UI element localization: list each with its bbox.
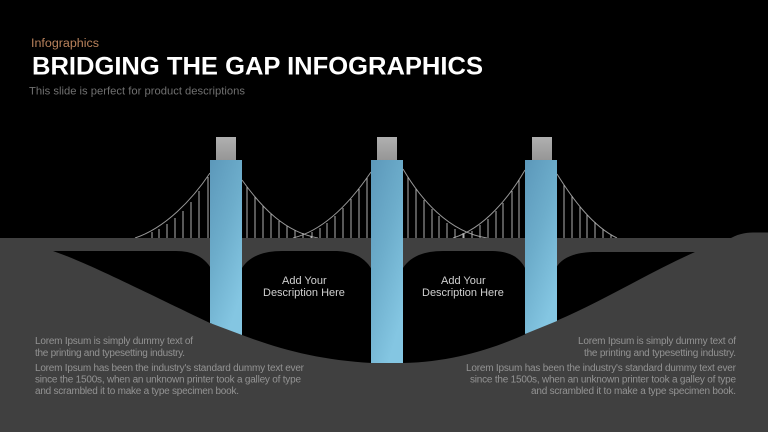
tower: left — [210, 137, 242, 335]
text block: left: the printing and typesetting industry. — [35, 348, 185, 359]
tower column — [525, 160, 557, 334]
text block: right: since the 1500s, when an unknown printer took a galley of type — [470, 374, 736, 386]
span label right: Description Here — [422, 287, 504, 299]
text block: right — [466, 336, 737, 397]
eyebrow label: Infographics — [31, 38, 99, 50]
text block: right: Lorem Ipsum has been the industry's standard dummy text ever — [466, 363, 737, 374]
text block: left: Lorem Ipsum is simply dummy text of — [35, 336, 193, 347]
span label left: Description Here — [263, 287, 345, 299]
tower cap — [216, 137, 236, 160]
text block: left: and scrambled it to make a type specimen book. — [35, 386, 239, 397]
tower cap — [532, 137, 552, 160]
text block: left — [35, 336, 305, 397]
tower column — [210, 160, 242, 335]
opening under centre-right span — [403, 251, 526, 363]
opening under centre-left span — [242, 251, 372, 363]
text block: left: since the 1500s, when an unknown printer took a galley of type — [35, 374, 301, 386]
vertical hangers — [152, 177, 611, 238]
ground and bridge deck — [0, 232, 768, 432]
tower column — [371, 160, 403, 363]
text block: left: Lorem Ipsum has been the industry's standard dummy text ever — [35, 363, 305, 374]
main cables — [135, 173, 210, 238]
opening under right span — [556, 252, 695, 321]
span label left: Add Your — [282, 275, 327, 287]
title: BRIDGING THE GAP INFOGRAPHICS — [32, 52, 483, 80]
heading block — [29, 38, 483, 98]
tower cap — [377, 137, 397, 160]
text block: right: and scrambled it to make a type specimen book. — [531, 386, 736, 397]
suspension cables and hangers — [135, 169, 617, 238]
subtitle: This slide is perfect for product descriptions — [29, 86, 245, 98]
tower: right — [525, 137, 557, 334]
tower: centre — [371, 137, 403, 363]
text block: right: Lorem Ipsum is simply dummy text of — [578, 336, 736, 347]
text block: right: the printing and typesetting industry. — [584, 348, 736, 359]
opening under left span — [53, 251, 212, 324]
span label right: Add Your — [441, 275, 486, 287]
